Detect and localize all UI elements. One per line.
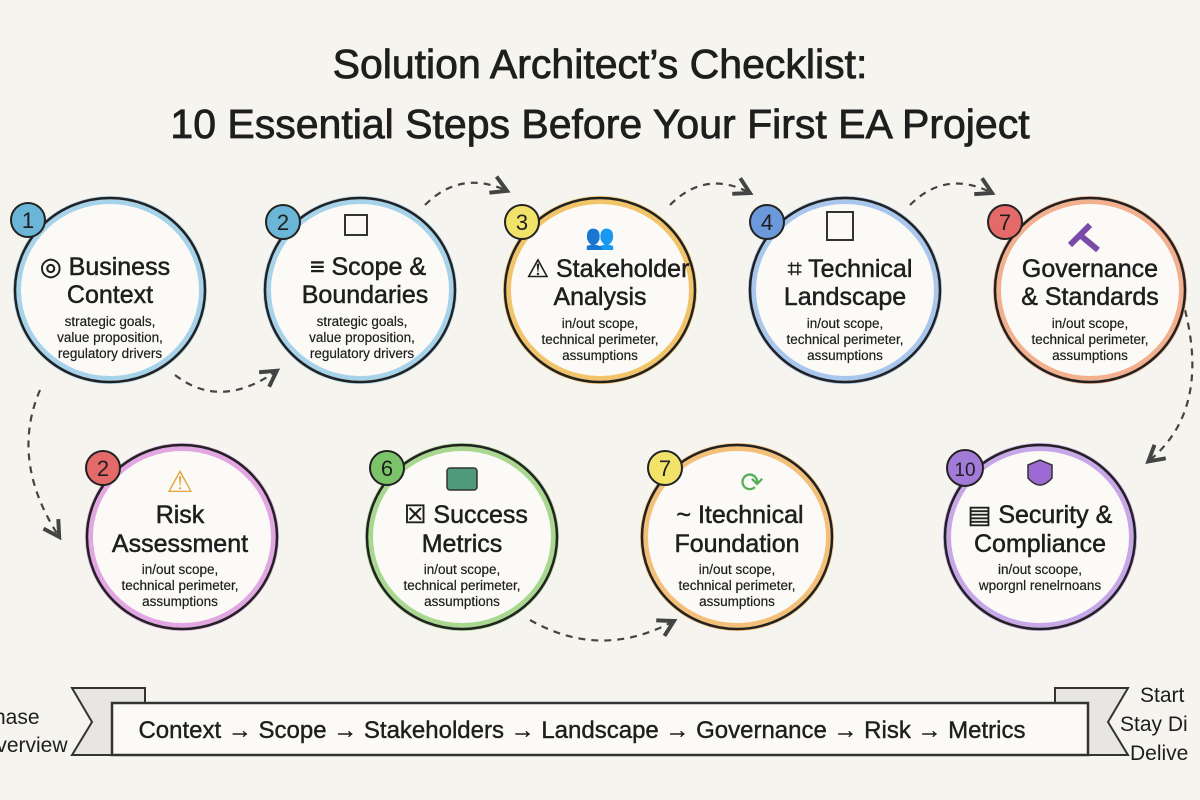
step 7 technical foundation <box>642 445 832 629</box>
step 3 stakeholder: ⚠ Stakeholder <box>527 255 689 283</box>
step 7 governance: in/out scope, <box>1052 316 1128 331</box>
step 1 business context: value proposition, <box>57 330 163 345</box>
step 2 scope: regulatory drivers <box>310 346 414 361</box>
step 1 business context: strategic goals, <box>65 314 155 329</box>
step 7 governance: assumptions <box>1052 348 1128 363</box>
title <box>170 41 1030 147</box>
step 2 risk: ⚠ <box>167 466 193 499</box>
step 6 success metrics: Metrics <box>422 530 502 558</box>
step 1 business context: ◎ Business <box>40 253 170 281</box>
step 4 technical landscape: ⌗ Technical <box>788 255 912 283</box>
step 2 risk: Assessment <box>112 530 248 558</box>
step 2 scope <box>265 198 455 382</box>
step 3 stakeholder: technical perimeter, <box>541 332 659 347</box>
step 6 success metrics: assumptions <box>424 594 500 609</box>
step 7 technical foundation: assumptions <box>699 594 775 609</box>
step 7 governance <box>988 198 1185 382</box>
title: 10 Essential Steps Before Your First EA Project <box>170 101 1030 147</box>
step 10 security: 10 <box>954 460 976 481</box>
step 7 governance: 7 <box>999 210 1011 235</box>
step 4 technical landscape: in/out scope, <box>807 316 883 331</box>
step 3 stakeholder: Analysis <box>553 283 647 311</box>
step 1 business context: regulatory drivers <box>58 346 162 361</box>
step 2 risk: assumptions <box>142 594 218 609</box>
banner <box>72 688 1128 755</box>
banner: Context → Scope → Stakeholders → Landscape → Governance → Risk → Metrics <box>138 717 1026 744</box>
step 7 technical foundation: 7 <box>659 456 671 481</box>
step 7 technical foundation: Foundation <box>674 530 800 558</box>
step 3 stakeholder: assumptions <box>562 348 638 363</box>
step 7 technical foundation: ⟳ <box>740 467 764 498</box>
step 2 scope: strategic goals, <box>317 314 407 329</box>
left label <box>0 706 68 757</box>
step 3 stakeholder: 👥 <box>585 224 615 251</box>
step 4 technical landscape: technical perimeter, <box>786 332 904 347</box>
step 2 risk: technical perimeter, <box>121 578 239 593</box>
step 7 technical foundation: technical perimeter, <box>678 578 796 593</box>
step 4 technical landscape: assumptions <box>807 348 883 363</box>
step 2 scope: 2 <box>277 210 289 235</box>
step 10 security: Compliance <box>974 530 1106 558</box>
step 1 business context: Context <box>67 281 153 309</box>
step 6 success metrics: 6 <box>381 456 393 481</box>
step 6 success metrics: ☒ Success <box>404 501 528 529</box>
step 10 security: wporgnl renelrnoans <box>978 578 1101 593</box>
step 4 technical landscape: 4 <box>761 210 773 235</box>
step 10 security: in/out scoope, <box>998 562 1082 577</box>
step 6 success metrics <box>367 445 557 629</box>
step 2 risk: 2 <box>97 456 109 481</box>
arrows: connectors <box>28 183 1192 641</box>
step 2 scope: Boundaries <box>302 281 428 309</box>
step 2 scope: ≡ Scope & <box>310 253 426 281</box>
step 3 stakeholder <box>505 198 695 382</box>
right label: Delive <box>1130 742 1188 765</box>
right label: Start <box>1140 684 1185 707</box>
step 7 governance: technical perimeter, <box>1031 332 1149 347</box>
step 2 risk: in/out scope, <box>142 562 218 577</box>
right label <box>1120 684 1188 765</box>
step 2 risk <box>86 445 277 629</box>
step 7 technical foundation: ~ Itechnical <box>676 501 804 529</box>
title: Solution Architect’s Checklist: <box>333 41 867 87</box>
step 4 technical landscape: Landscape <box>784 283 906 311</box>
right label: Stay Di <box>1120 713 1188 736</box>
step 10 security: ▤ Security & <box>968 501 1113 529</box>
step 2 scope: value proposition, <box>309 330 415 345</box>
step 7 governance: & Standards <box>1021 283 1159 311</box>
step 10 security <box>945 445 1135 629</box>
step 7 technical foundation: in/out scope, <box>699 562 775 577</box>
step 6 success metrics: technical perimeter, <box>403 578 521 593</box>
step 3 stakeholder: in/out scope, <box>562 316 638 331</box>
step 4 technical landscape <box>750 198 940 382</box>
step 7 governance: Governance <box>1022 255 1158 283</box>
step 2 risk: Risk <box>156 501 205 529</box>
step 1 business context <box>11 198 205 382</box>
step 1 business context: 1 <box>22 208 34 233</box>
step 6 success metrics: in/out scope, <box>424 562 500 577</box>
step 3 stakeholder: 3 <box>516 210 528 235</box>
